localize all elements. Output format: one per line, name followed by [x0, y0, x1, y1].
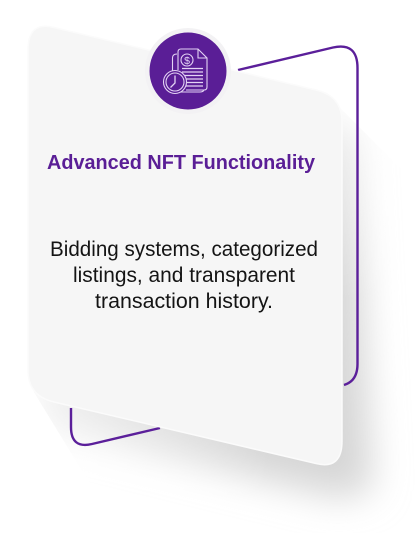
- card panel: [28, 26, 342, 465]
- body text: transaction history.: [95, 290, 273, 313]
- body text: [50, 238, 318, 313]
- purple outline: top right: [238, 47, 358, 385]
- icon: invoice with dollar and clock: $: [184, 55, 190, 67]
- heading: Advanced NFT Functionality: [47, 152, 316, 174]
- infographic card: [29, 27, 385, 509]
- icon badge: [145, 28, 231, 114]
- card long shadow: [45, 125, 385, 509]
- body text: Bidding systems, categorized: [50, 238, 318, 261]
- purple outline: bottom left: [71, 408, 160, 445]
- body text: listings, and transparent: [73, 264, 295, 287]
